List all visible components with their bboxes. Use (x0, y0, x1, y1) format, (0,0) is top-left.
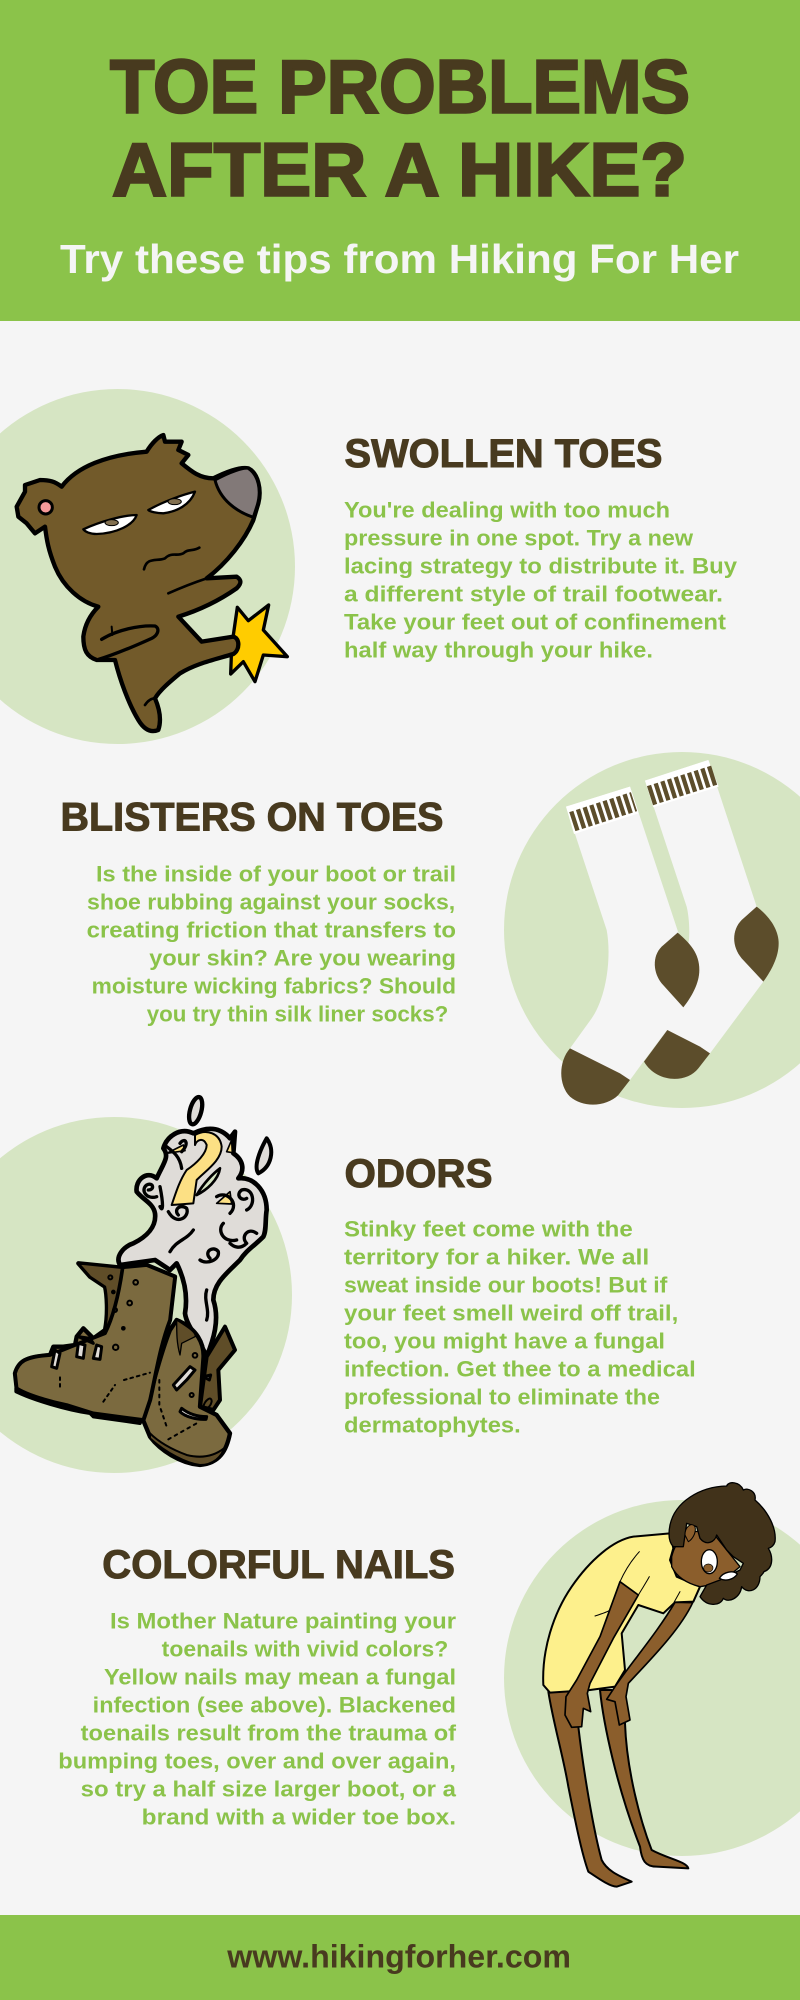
text block: colorful nails: toenails with vivid colors? (162, 1637, 448, 1662)
text block: swollen toes: half way through your hike. (344, 637, 653, 662)
subtitle: Try these tips from Hiking For Her (60, 236, 739, 282)
text block: odors (344, 1217, 696, 1438)
footer banner (0, 1915, 800, 2000)
text block: blisters on toes: moisture wicking fabrics? Should (92, 974, 456, 999)
icon: kicking bear (17, 435, 287, 731)
icon: pair of socks (561, 760, 779, 1105)
circle backdrop (0, 1117, 292, 1473)
panel: colorful nails (58, 1483, 800, 1887)
circle backdrop (0, 389, 295, 744)
text block: colorful nails (58, 1609, 457, 1830)
text block: odors: your feet smell weird off trail, (344, 1301, 678, 1326)
text block: swollen toes: Take your feet out of confinement (344, 609, 727, 634)
icon: person bending over (543, 1483, 775, 1887)
heading: swollen toes: SWOLLEN TOES (344, 432, 662, 476)
footer url: www.hikingforher.com (226, 1939, 571, 1975)
panel: swollen toes (0, 389, 738, 744)
text block: odors: infection. Get thee to a medical (344, 1357, 696, 1382)
text block: colorful nails: Is Mother Nature painting your (110, 1609, 456, 1634)
text block: blisters on toes: Is the inside of your boot or trail (96, 862, 456, 887)
text block: swollen toes: You're dealing with too much (344, 497, 670, 522)
text block: colorful nails: brand with a wider toe box. (142, 1805, 456, 1830)
text block: odors: Stinky feet come with the (344, 1217, 633, 1242)
circle backdrop (504, 1500, 800, 1856)
text block: swollen toes: lacing strategy to distribute it. Buy (344, 553, 738, 578)
text block: swollen toes: pressure in one spot. Try a new (344, 525, 694, 550)
text block: colorful nails: so try a half size larger boot, or a (81, 1777, 457, 1802)
text block: blisters on toes: creating friction that transfers to (87, 918, 456, 943)
text block: odors: dermatophytes. (344, 1413, 521, 1438)
title: TOE PROBLEMS (110, 44, 690, 128)
text block: colorful nails: infection (see above). Blackened (93, 1693, 456, 1718)
text block: blisters on toes: shoe rubbing against your socks, (87, 890, 455, 915)
text block: colorful nails: Yellow nails may mean a fungal (104, 1665, 456, 1690)
text block: blisters on toes: you try thin silk liner socks? (147, 1002, 448, 1027)
title: AFTER A HIKE? (112, 128, 687, 212)
header banner (0, 0, 800, 321)
text block: odors: territory for a hiker. We all (344, 1245, 649, 1270)
title (110, 44, 690, 212)
text block: blisters on toes (87, 862, 456, 1027)
text block: odors: professional to eliminate the (344, 1385, 660, 1410)
text block: swollen toes (344, 497, 738, 662)
text block: odors: too, you might have a fungal (344, 1329, 665, 1354)
panel: blisters on toes (60, 752, 800, 1108)
heading: colorful nails: COLORFUL NAILS (102, 1543, 455, 1587)
heading: blisters on toes: BLISTERS ON TOES (60, 796, 444, 840)
text block: colorful nails: bumping toes, over and over again, (58, 1749, 456, 1774)
panel: odors (0, 1096, 696, 1473)
heading: odors: ODORS (344, 1152, 492, 1196)
text block: blisters on toes: your skin? Are you wearing (149, 946, 456, 971)
text block: swollen toes: a different style of trail footwear. (344, 581, 723, 606)
text block: colorful nails: toenails result from the trauma of (81, 1721, 457, 1746)
text block: odors: sweat inside our boots! But if (344, 1273, 668, 1298)
icon: smelly boots (15, 1096, 271, 1465)
circle backdrop (504, 752, 800, 1108)
